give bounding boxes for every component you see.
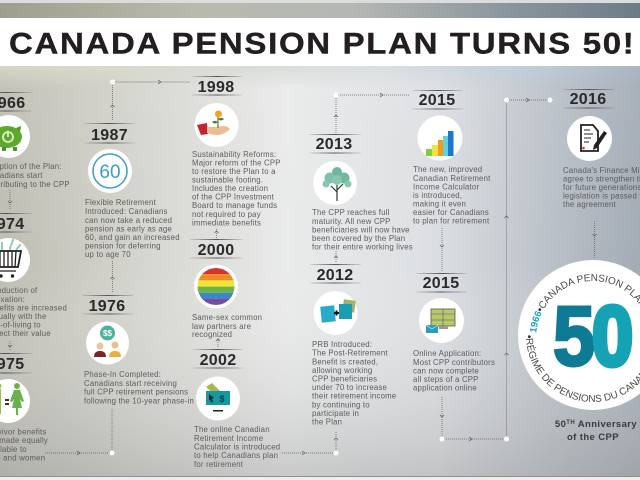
title banner [0, 18, 640, 66]
badge number 50: 5 [553, 289, 595, 383]
icon: calculator monitor: $ [219, 394, 225, 404]
icon: coins and retirees: $$ [103, 329, 112, 338]
panel: 1976 [82, 296, 194, 406]
panel: 1987: pension for deferring [85, 242, 161, 250]
panel: 1976: following the 10-year phase-in [84, 396, 194, 406]
timeline connector arrows [8, 80, 596, 456]
panel: 2012: their retirement income [312, 392, 396, 400]
panel: 1987: pension as early as age [85, 224, 172, 234]
panel: 2012: allowing working [312, 366, 372, 375]
panel: 1998: of the CPP Investment [192, 192, 275, 202]
panel: 50th anniversary badge [518, 260, 640, 443]
panel: 2012 [310, 264, 396, 426]
panel: 2015 calculator: making it even [413, 200, 466, 208]
panel: 2012: 2012 [317, 267, 353, 284]
panel: 1987: 60, and gain an increased [85, 233, 180, 242]
panel: 2013: been covered by the Plan [312, 234, 405, 243]
panel: 2015 online application [413, 274, 495, 392]
panel: 2015 online application: Online Application: [413, 349, 481, 358]
panel: 2015 online application: can now complete [413, 366, 479, 376]
panel: 2015 calculator: The new, improved [413, 165, 482, 174]
panel: 1976: Phase-In Completed: [84, 370, 161, 379]
panel: 2012: PRB Introduced: [312, 340, 372, 349]
panel: 1998: Major reform of the CPP [192, 158, 281, 168]
badge number 50 [553, 289, 633, 383]
panel: 2012: Benefit is created, [312, 358, 378, 366]
badge caption: Anniversary [575, 419, 637, 430]
panel: 2002: for retirement [194, 460, 244, 469]
panel: 2000 [190, 240, 262, 339]
panel: 2015 online application: Most CPP contributors [413, 358, 495, 367]
badge number 50: 0 [592, 289, 633, 383]
panel: 2012: CPP beneficiaries [312, 374, 377, 384]
panel: 1976: Canadians start receiving [84, 379, 177, 388]
icon: bar chart [426, 131, 454, 156]
icon: tree [322, 167, 352, 201]
panel: 2016 [563, 90, 640, 209]
panel: 2012: participate in [312, 409, 359, 418]
panel: 1975 [0, 354, 48, 462]
title banner: CANADA PENSION PLAN TURNS 50! [9, 26, 634, 60]
icon: equal man and woman [0, 383, 24, 415]
panel: 1987 [84, 124, 180, 259]
panel: 2013: maturity. All new CPP [312, 217, 391, 226]
panel: 1987: can now take a reduced [85, 216, 172, 225]
panel: 2015 calculator [412, 90, 491, 226]
panel: 1987: Introduced: Canadians [85, 207, 168, 216]
panel: 2013: The CPP reaches full [312, 208, 390, 217]
panel: 1976: full CPP retirement pensions [84, 388, 188, 396]
panel: 1974 [0, 214, 67, 338]
panel: 1998: Includes the creation [192, 184, 268, 193]
icon: sticky notes [320, 299, 356, 323]
panel: 2015 online application: all steps of a CPP [413, 375, 479, 384]
panel: 1987: up to age 70 [85, 250, 131, 259]
panel: 1998: to restore the Plan to a [192, 167, 276, 176]
icon: green piggy bank [0, 126, 22, 151]
panel: 2012: by continuing to [312, 400, 370, 410]
panel: 2002: The online Canadian [194, 425, 270, 434]
panel: 2015 calculator: to plan for retirement [413, 216, 490, 226]
panel: 1998: immediate benefits [192, 218, 261, 228]
panel: 2013: for their entire working lives [312, 242, 413, 252]
badge caption: TH [566, 420, 575, 426]
panel: 2000: 2000 [198, 242, 234, 259]
panel: 2002: to help Canadians plan [194, 451, 278, 460]
panel: 2015 online application: application online [413, 384, 477, 392]
panel: 2000: Same-sex common [192, 313, 262, 322]
icon: computer and envelope [426, 309, 455, 333]
panel: 2002 [193, 350, 280, 469]
panel: 1998 [192, 76, 281, 228]
icon: 60 ring: 60 [99, 162, 121, 183]
panel: 2012: The Post-Retirement [312, 348, 388, 358]
panel: 1987: Flexible Retirement [85, 198, 157, 207]
badge caption: 50 [555, 419, 637, 430]
panel: 2016: 2016 [570, 91, 606, 108]
badge ring text [526, 274, 640, 402]
panel: 2002: Retirement Income [194, 434, 263, 443]
panel: 2002: Calculator is introduced [194, 442, 280, 452]
panel: 1998: 1998 [198, 79, 234, 96]
panel: 2013: 2013 [316, 136, 352, 153]
panel: 2015 calculator: Income Calculator [413, 182, 479, 192]
panel: 1976: 1976 [89, 298, 125, 315]
panel: 1998: sustainable footing. [192, 176, 263, 184]
panel: 2012: under 70 to increase [312, 383, 387, 392]
panel: 1998: Board to manage funds [192, 201, 277, 210]
icon: shopping cart [0, 239, 21, 278]
panel: 2000: recognized [192, 330, 232, 339]
icon: hand holding flower [197, 110, 230, 135]
icon: rainbow circle [196, 268, 236, 305]
panel: 2015 calculator: is introduced, [413, 191, 462, 200]
panel: 2012: the Plan [312, 418, 342, 426]
panel: 1987: 1987 [91, 127, 128, 144]
panel: 1998: not required to pay [192, 210, 261, 219]
panel: 2015 calculator: easier for Canadians [413, 208, 489, 217]
icon: document and pen [581, 125, 607, 151]
panel: 2016: the agreement [563, 200, 617, 209]
panel: 2002: 2002 [200, 352, 236, 369]
panel: 2015 calculator: Canadian Retirement [413, 174, 491, 183]
badge caption: of the CPP [567, 432, 619, 443]
panel: 2015 online application: 2015 [423, 275, 459, 292]
panel: 2015 calculator: 2015 [419, 92, 455, 109]
panel: 2000: law partners are [192, 322, 251, 331]
panel: 2013 [309, 134, 413, 252]
panel: 1966 [0, 92, 70, 189]
panel: 2013: beneficiaries will now have [312, 226, 410, 234]
panel: 1998: Sustainability Reforms: [192, 150, 276, 159]
